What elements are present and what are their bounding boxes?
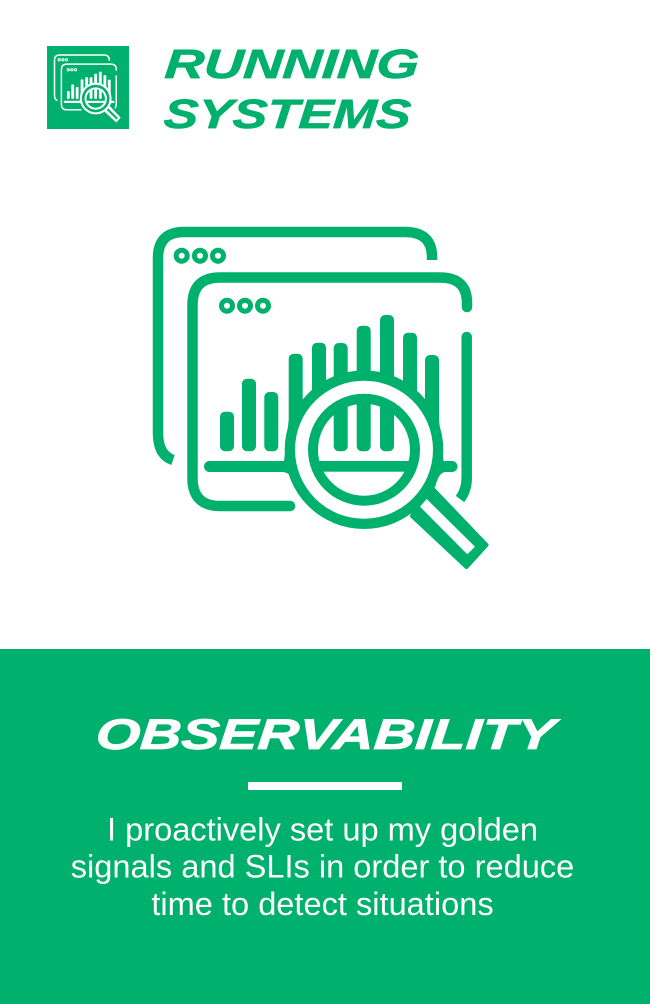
- description text: [71, 810, 574, 922]
- icon: small window chart with magnifier: [54, 55, 120, 122]
- divider bar: [248, 782, 402, 790]
- description text: signals and SLIs in order to reduce: [71, 848, 574, 884]
- heading: OBSERVABILITY: [94, 711, 561, 759]
- header title: SYSTEMS: [162, 91, 413, 137]
- description text: I proactively set up my golden: [107, 810, 538, 848]
- icon: browser windows with bar chart and magnifier: [158, 232, 486, 567]
- header title: [162, 41, 421, 137]
- header title: RUNNING: [163, 41, 421, 87]
- panel: observability: [0, 649, 650, 1004]
- description text: time to detect situations: [151, 885, 494, 922]
- logo badge: [47, 46, 129, 129]
